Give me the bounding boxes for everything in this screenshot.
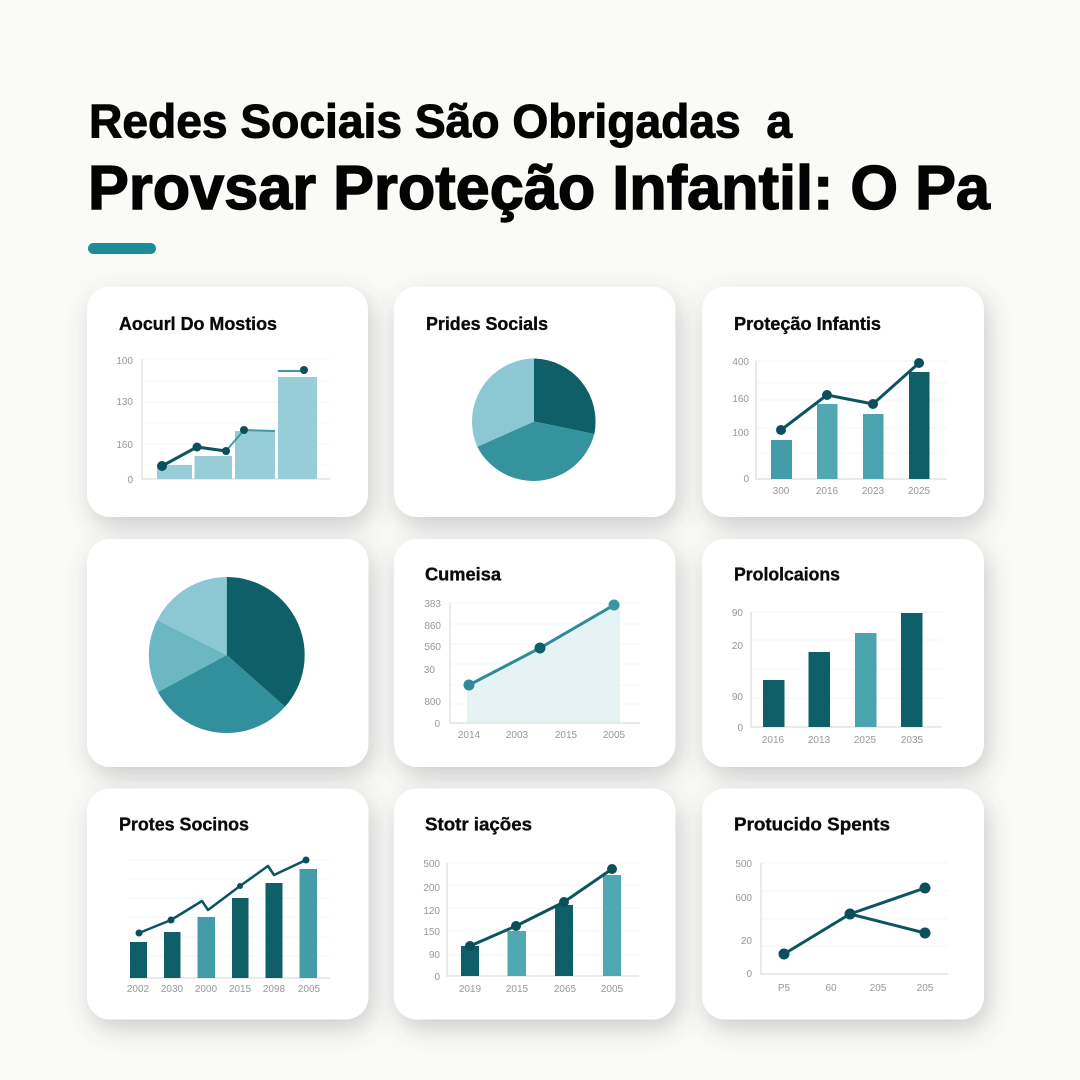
bar and line chart: 0: [127, 475, 133, 486]
title accent bar: [88, 243, 156, 254]
bar and line chart: [127, 856, 330, 995]
line chart: 500: [735, 859, 752, 870]
bar and line chart: 90: [429, 950, 440, 961]
heading: Proteção Infantis: Proteção Infantis: [734, 314, 881, 334]
panel: Aocurl Do Mostios: [87, 286, 368, 517]
bar and line chart: 2002: [127, 984, 150, 995]
panel: Protucido Spents: [702, 788, 984, 1020]
panel: Cumeisa: [394, 539, 676, 767]
bar and line chart: 2005: [601, 984, 624, 995]
bar and line chart: 160: [732, 394, 749, 405]
line chart: 600: [735, 893, 752, 904]
panel: Protes Socinos: [87, 788, 368, 1020]
area line chart: 2003: [506, 730, 529, 741]
bar and line chart: 2016: [816, 486, 839, 497]
bar and line chart: 200: [423, 883, 440, 894]
area line chart: 30: [424, 665, 435, 676]
pie chart: [149, 577, 305, 733]
bar chart: [732, 608, 942, 746]
heading: Protucido Spents: Protucido Spents: [734, 814, 890, 834]
bar and line chart: 100: [116, 356, 133, 367]
bar and line chart: 0: [743, 474, 749, 485]
bar and line chart: 2098: [263, 984, 286, 995]
pie chart: [472, 358, 596, 481]
heading: Prololcaions: Prololcaions: [734, 564, 840, 584]
bar and line chart: 120: [423, 906, 440, 917]
area line chart: 383: [424, 599, 441, 610]
line chart: 0: [746, 969, 752, 980]
area line chart: 800: [424, 697, 441, 708]
panel: Proteção Infantis: [702, 286, 984, 517]
bar and line chart: 2005: [298, 984, 321, 995]
area line chart: 2005: [603, 730, 626, 741]
panel: Stotr iações: [394, 788, 676, 1020]
line chart: P5: [778, 983, 791, 994]
bar chart: 20: [732, 641, 743, 652]
line chart: 60: [825, 983, 837, 994]
bar and line chart: 130: [116, 397, 133, 408]
line chart: 20: [741, 936, 752, 947]
bar chart: 2035: [901, 735, 924, 746]
bar and line chart: 2030: [161, 984, 184, 995]
bar and line chart: 2000: [195, 984, 218, 995]
bar and line chart: [116, 356, 330, 486]
line chart: 205: [870, 983, 887, 994]
bar and line chart: 400: [732, 357, 749, 368]
bar chart: 2013: [808, 735, 831, 746]
title: Provsar Proteção Infantil: O Pa: [88, 154, 991, 223]
panel: Prides Socials: [394, 286, 676, 517]
title: Redes Sociais São Obrigadas a: [89, 94, 793, 148]
panel: Prololcaions: [702, 539, 984, 767]
bar and line chart: 2015: [229, 984, 252, 995]
bar and line chart: 0: [434, 972, 440, 983]
bar and line chart: 2065: [554, 984, 577, 995]
area line chart: 2014: [458, 730, 481, 741]
area line chart: 860: [424, 621, 441, 632]
panel: large pie: [87, 539, 368, 767]
area line chart: [424, 599, 640, 741]
bar and line chart: 500: [423, 859, 440, 870]
bar and line chart: 2015: [506, 984, 529, 995]
line chart: 205: [917, 983, 934, 994]
bar and line chart: 300: [773, 486, 790, 497]
bar and line chart: 150: [423, 927, 440, 938]
area line chart: 2015: [555, 730, 578, 741]
bar and line chart: 2025: [908, 486, 931, 497]
heading: Cumeisa: Cumeisa: [425, 564, 502, 584]
bar and line chart: 2019: [459, 984, 482, 995]
bar chart: 0: [737, 723, 743, 734]
area line chart: 560: [424, 642, 441, 653]
bar chart: 90: [732, 692, 743, 703]
bar and line chart: [732, 357, 947, 497]
heading: Stotr iações: Stotr iações: [425, 814, 532, 834]
heading: Protes Socinos: Protes Socinos: [119, 814, 249, 834]
bar and line chart: 160: [116, 440, 133, 451]
area line chart: 0: [434, 719, 440, 730]
line chart: [735, 859, 948, 994]
title: [88, 94, 991, 223]
bar and line chart: [423, 859, 639, 995]
bar chart: 2016: [762, 735, 785, 746]
bar chart: 90: [732, 608, 743, 619]
bar and line chart: 100: [732, 428, 749, 439]
bar and line chart: 2023: [862, 486, 885, 497]
heading: Prides Socials: Prides Socials: [426, 314, 548, 334]
bar chart: 2025: [854, 735, 877, 746]
heading: Aocurl Do Mostios: Aocurl Do Mostios: [119, 314, 277, 334]
